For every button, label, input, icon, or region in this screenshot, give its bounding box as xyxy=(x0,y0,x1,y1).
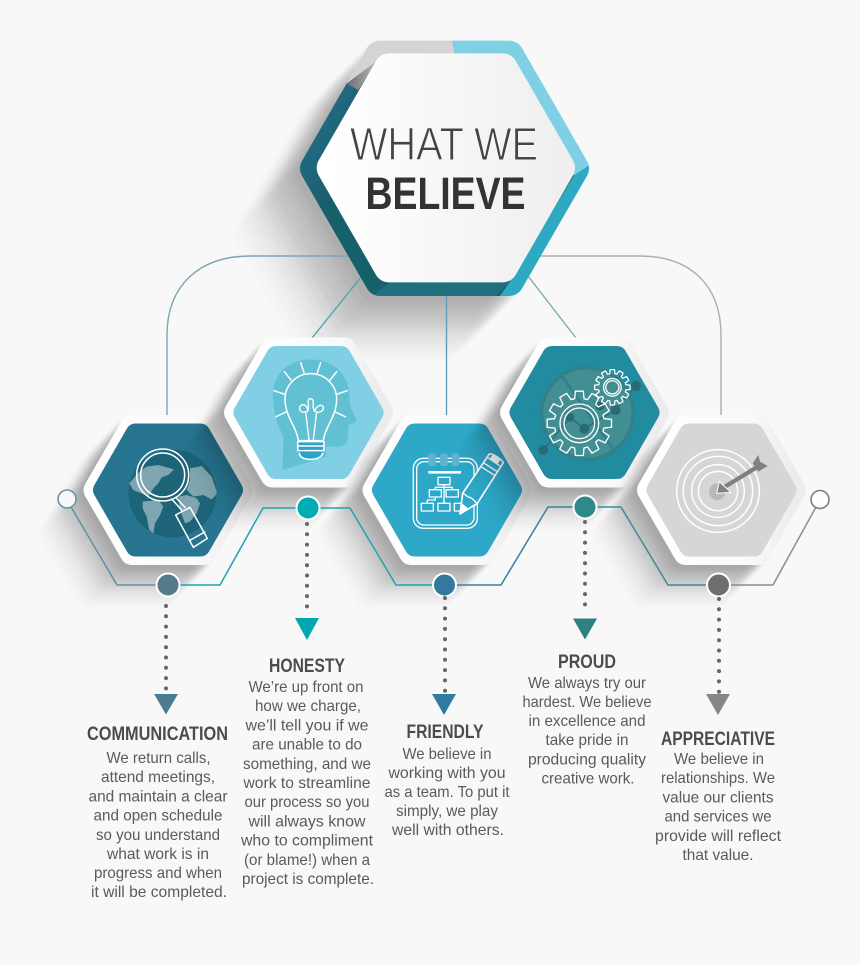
heading: COMMUNICATION xyxy=(87,724,228,745)
heading: PROUD xyxy=(558,652,616,673)
shadow xyxy=(52,431,236,597)
heading: HONESTY xyxy=(269,656,345,677)
body: something, and we xyxy=(243,756,371,773)
inner panel xyxy=(656,434,786,546)
body: producing quality xyxy=(528,752,646,768)
hexagon: friendly xyxy=(330,427,520,597)
title: believe: BELIEVE xyxy=(366,168,526,219)
body: relationships. We xyxy=(661,770,775,787)
dotted arrow: communication xyxy=(154,606,178,714)
outer frame xyxy=(236,350,381,476)
body: provide will reflect xyxy=(655,828,782,845)
body: progress and when xyxy=(94,865,222,882)
body: (or blame!) when a xyxy=(244,852,370,869)
body: so you understand xyxy=(96,827,220,844)
icon: head with light bulb xyxy=(273,359,357,470)
icon: globe and magnifier xyxy=(128,449,217,547)
text block: proud xyxy=(522,652,652,788)
node: appreciative xyxy=(707,574,730,596)
body: what work is in xyxy=(106,846,209,863)
dotted arrow: appreciative xyxy=(706,599,730,715)
hexagon: honesty xyxy=(192,350,381,520)
shadow xyxy=(605,431,790,597)
right end ring xyxy=(811,490,829,508)
left end ring xyxy=(58,490,76,508)
body xyxy=(88,750,228,901)
outer frame xyxy=(374,427,520,553)
hexagon ring xyxy=(300,40,589,296)
main hexagon shadow xyxy=(249,62,568,347)
body xyxy=(240,679,374,888)
body: working with you xyxy=(388,765,506,782)
body: our process so you xyxy=(244,794,370,811)
body: work to streamline xyxy=(243,775,371,792)
body: project is complete. xyxy=(242,871,374,888)
node: proud xyxy=(574,496,596,518)
body: creative work. xyxy=(542,770,634,788)
text block: appreciative xyxy=(655,729,782,864)
text block: communication xyxy=(87,724,228,901)
text block: honesty xyxy=(240,656,374,888)
body: as a team. To put it xyxy=(384,784,510,801)
dotted arrow: proud xyxy=(573,522,597,640)
body: and maintain a clear xyxy=(88,788,228,806)
body xyxy=(384,746,510,839)
hexagon: appreciative xyxy=(605,427,794,597)
body xyxy=(522,675,652,788)
inner white hexagon xyxy=(332,68,560,267)
body: We’re up front on xyxy=(248,679,364,696)
node: honesty xyxy=(296,496,320,520)
body: We believe in xyxy=(402,746,492,763)
shadow xyxy=(330,431,516,597)
dotted arrow: friendly xyxy=(432,598,456,715)
body: take pride in xyxy=(546,732,628,749)
heading: FRIENDLY xyxy=(406,722,484,743)
outer frame xyxy=(96,427,240,553)
outer frame xyxy=(512,350,657,476)
icon: notepad with org chart and pencil xyxy=(413,453,503,528)
main hexagon xyxy=(300,40,589,296)
body: in excellence and xyxy=(528,713,646,730)
body: that value. xyxy=(682,847,754,864)
connectors from main hexagon xyxy=(167,256,721,424)
body: how we charge, xyxy=(255,698,361,715)
body: will always know xyxy=(248,814,366,830)
dotted arrow: honesty xyxy=(295,524,319,640)
text block: friendly xyxy=(384,722,510,839)
body: We believe in xyxy=(674,751,764,768)
body: We always try our xyxy=(528,675,647,692)
shadow xyxy=(192,354,377,520)
shadow xyxy=(468,354,653,520)
body: and open schedule xyxy=(94,808,223,824)
inner panel xyxy=(520,356,650,469)
hexagon: proud xyxy=(468,350,657,520)
body xyxy=(655,751,782,864)
body: it will be completed. xyxy=(91,884,227,901)
body: are unable to do xyxy=(252,736,362,754)
inner panel xyxy=(382,434,512,546)
title: what we: WHAT WE xyxy=(350,118,538,170)
body: and services we xyxy=(664,808,772,826)
body: we’ll tell you if we xyxy=(245,718,369,734)
inner panel xyxy=(103,434,233,546)
outer frame xyxy=(649,427,794,553)
heading: APPRECIATIVE xyxy=(661,729,775,750)
body: who to compliment xyxy=(240,832,374,850)
body: value our clients xyxy=(662,790,774,806)
body: We return calls, xyxy=(106,750,210,767)
body: simply, we play xyxy=(396,803,498,820)
icon: gears xyxy=(538,368,641,459)
body: attend meetings, xyxy=(101,769,215,786)
node: communication xyxy=(156,574,180,596)
node: friendly xyxy=(433,574,456,596)
body: hardest. We believe xyxy=(522,694,652,711)
inner panel xyxy=(244,356,374,469)
hexagon: communication xyxy=(52,427,240,597)
body: well with others. xyxy=(391,822,504,839)
icon: target and arrow xyxy=(677,450,768,532)
lower connecting line xyxy=(71,507,816,585)
